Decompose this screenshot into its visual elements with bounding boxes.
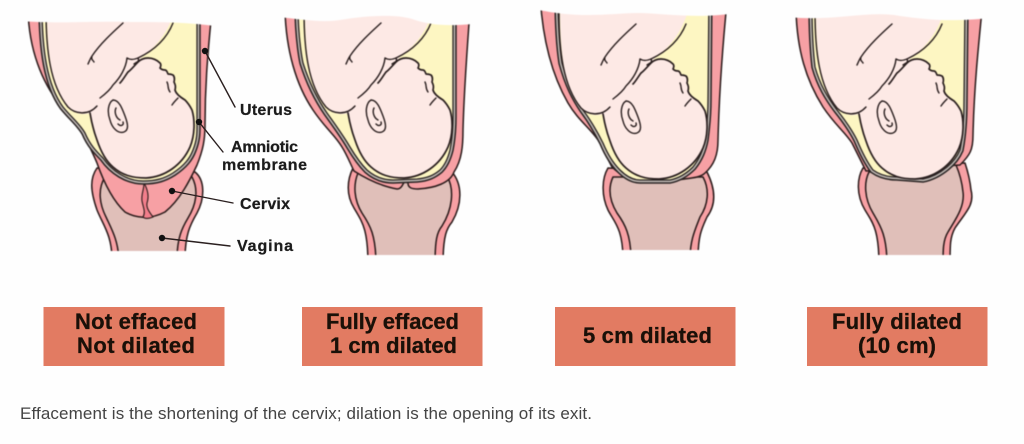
panel: 5 cm dilated bbox=[530, 0, 735, 270]
fetus bbox=[559, 1, 707, 179]
label box: not effaced, not dilated bbox=[44, 307, 224, 366]
fetus bbox=[46, 0, 194, 178]
label box: fully dilated: (10 cm) bbox=[858, 333, 936, 358]
uterus wall with thinned cervix bbox=[285, 10, 470, 189]
leader lines bbox=[162, 51, 235, 246]
vagina wall bbox=[92, 168, 203, 260]
amniotic membrane bbox=[42, 5, 197, 181]
label: Uterus: Uterus bbox=[240, 102, 292, 119]
label box: fully effaced, 1 cm dilated: Fully effaced bbox=[326, 309, 459, 334]
label: Cervix: Cervix bbox=[240, 196, 290, 213]
vagina bbox=[866, 165, 963, 265]
top and bottom fade bbox=[530, 0, 735, 270]
fetus bbox=[815, 1, 963, 179]
uterus wall bbox=[540, 0, 728, 180]
panel: fully effaced, 1 cm dilated bbox=[278, 0, 480, 275]
uterus wall bbox=[796, 10, 982, 171]
fetus bbox=[304, 0, 452, 178]
label box: 5 cm dilated bbox=[555, 307, 736, 366]
vagina bbox=[355, 173, 452, 265]
amniotic membrane bbox=[298, 5, 453, 180]
panel: not effaced, not dilated bbox=[20, 0, 222, 270]
vagina bbox=[610, 177, 707, 260]
vagina wall bbox=[348, 168, 460, 265]
label: Amniotic membrane bbox=[222, 139, 307, 174]
amniotic membrane bbox=[812, 5, 965, 179]
label box: fully dilated bbox=[807, 307, 988, 366]
label box: not effaced, not dilated: Not dilated bbox=[77, 333, 195, 358]
top and bottom fade bbox=[20, 0, 222, 270]
callout dots bbox=[159, 48, 208, 241]
label box: fully dilated: Fully dilated bbox=[832, 309, 962, 334]
vagina wall bbox=[603, 168, 714, 260]
label box: fully effaced, 1 cm dilated: 1 cm dilated bbox=[330, 333, 457, 358]
label: Amniotic membrane: Amniotic bbox=[231, 139, 298, 156]
vagina bbox=[100, 177, 196, 260]
label box: not effaced, not dilated: Not effaced bbox=[75, 309, 197, 334]
caption: Effacement is the shortening of the cervix; dilation is the opening of its exit. bbox=[20, 404, 592, 423]
label box: fully effaced, 1 cm dilated bbox=[302, 307, 482, 366]
amniotic membrane bbox=[558, 0, 709, 180]
label: Amniotic membrane: membrane bbox=[222, 157, 307, 174]
uterus wall and cervix bbox=[28, 10, 212, 217]
panel: fully dilated bbox=[790, 0, 990, 275]
top and bottom fade bbox=[790, 0, 990, 275]
label box: 5 cm dilated: 5 cm dilated bbox=[583, 323, 712, 348]
cervical canal bbox=[142, 183, 153, 218]
labels: anatomy callouts bbox=[159, 48, 307, 255]
label: Vagina: Vagina bbox=[237, 238, 293, 255]
top and bottom fade bbox=[278, 0, 480, 275]
vagina wall bbox=[858, 163, 972, 265]
